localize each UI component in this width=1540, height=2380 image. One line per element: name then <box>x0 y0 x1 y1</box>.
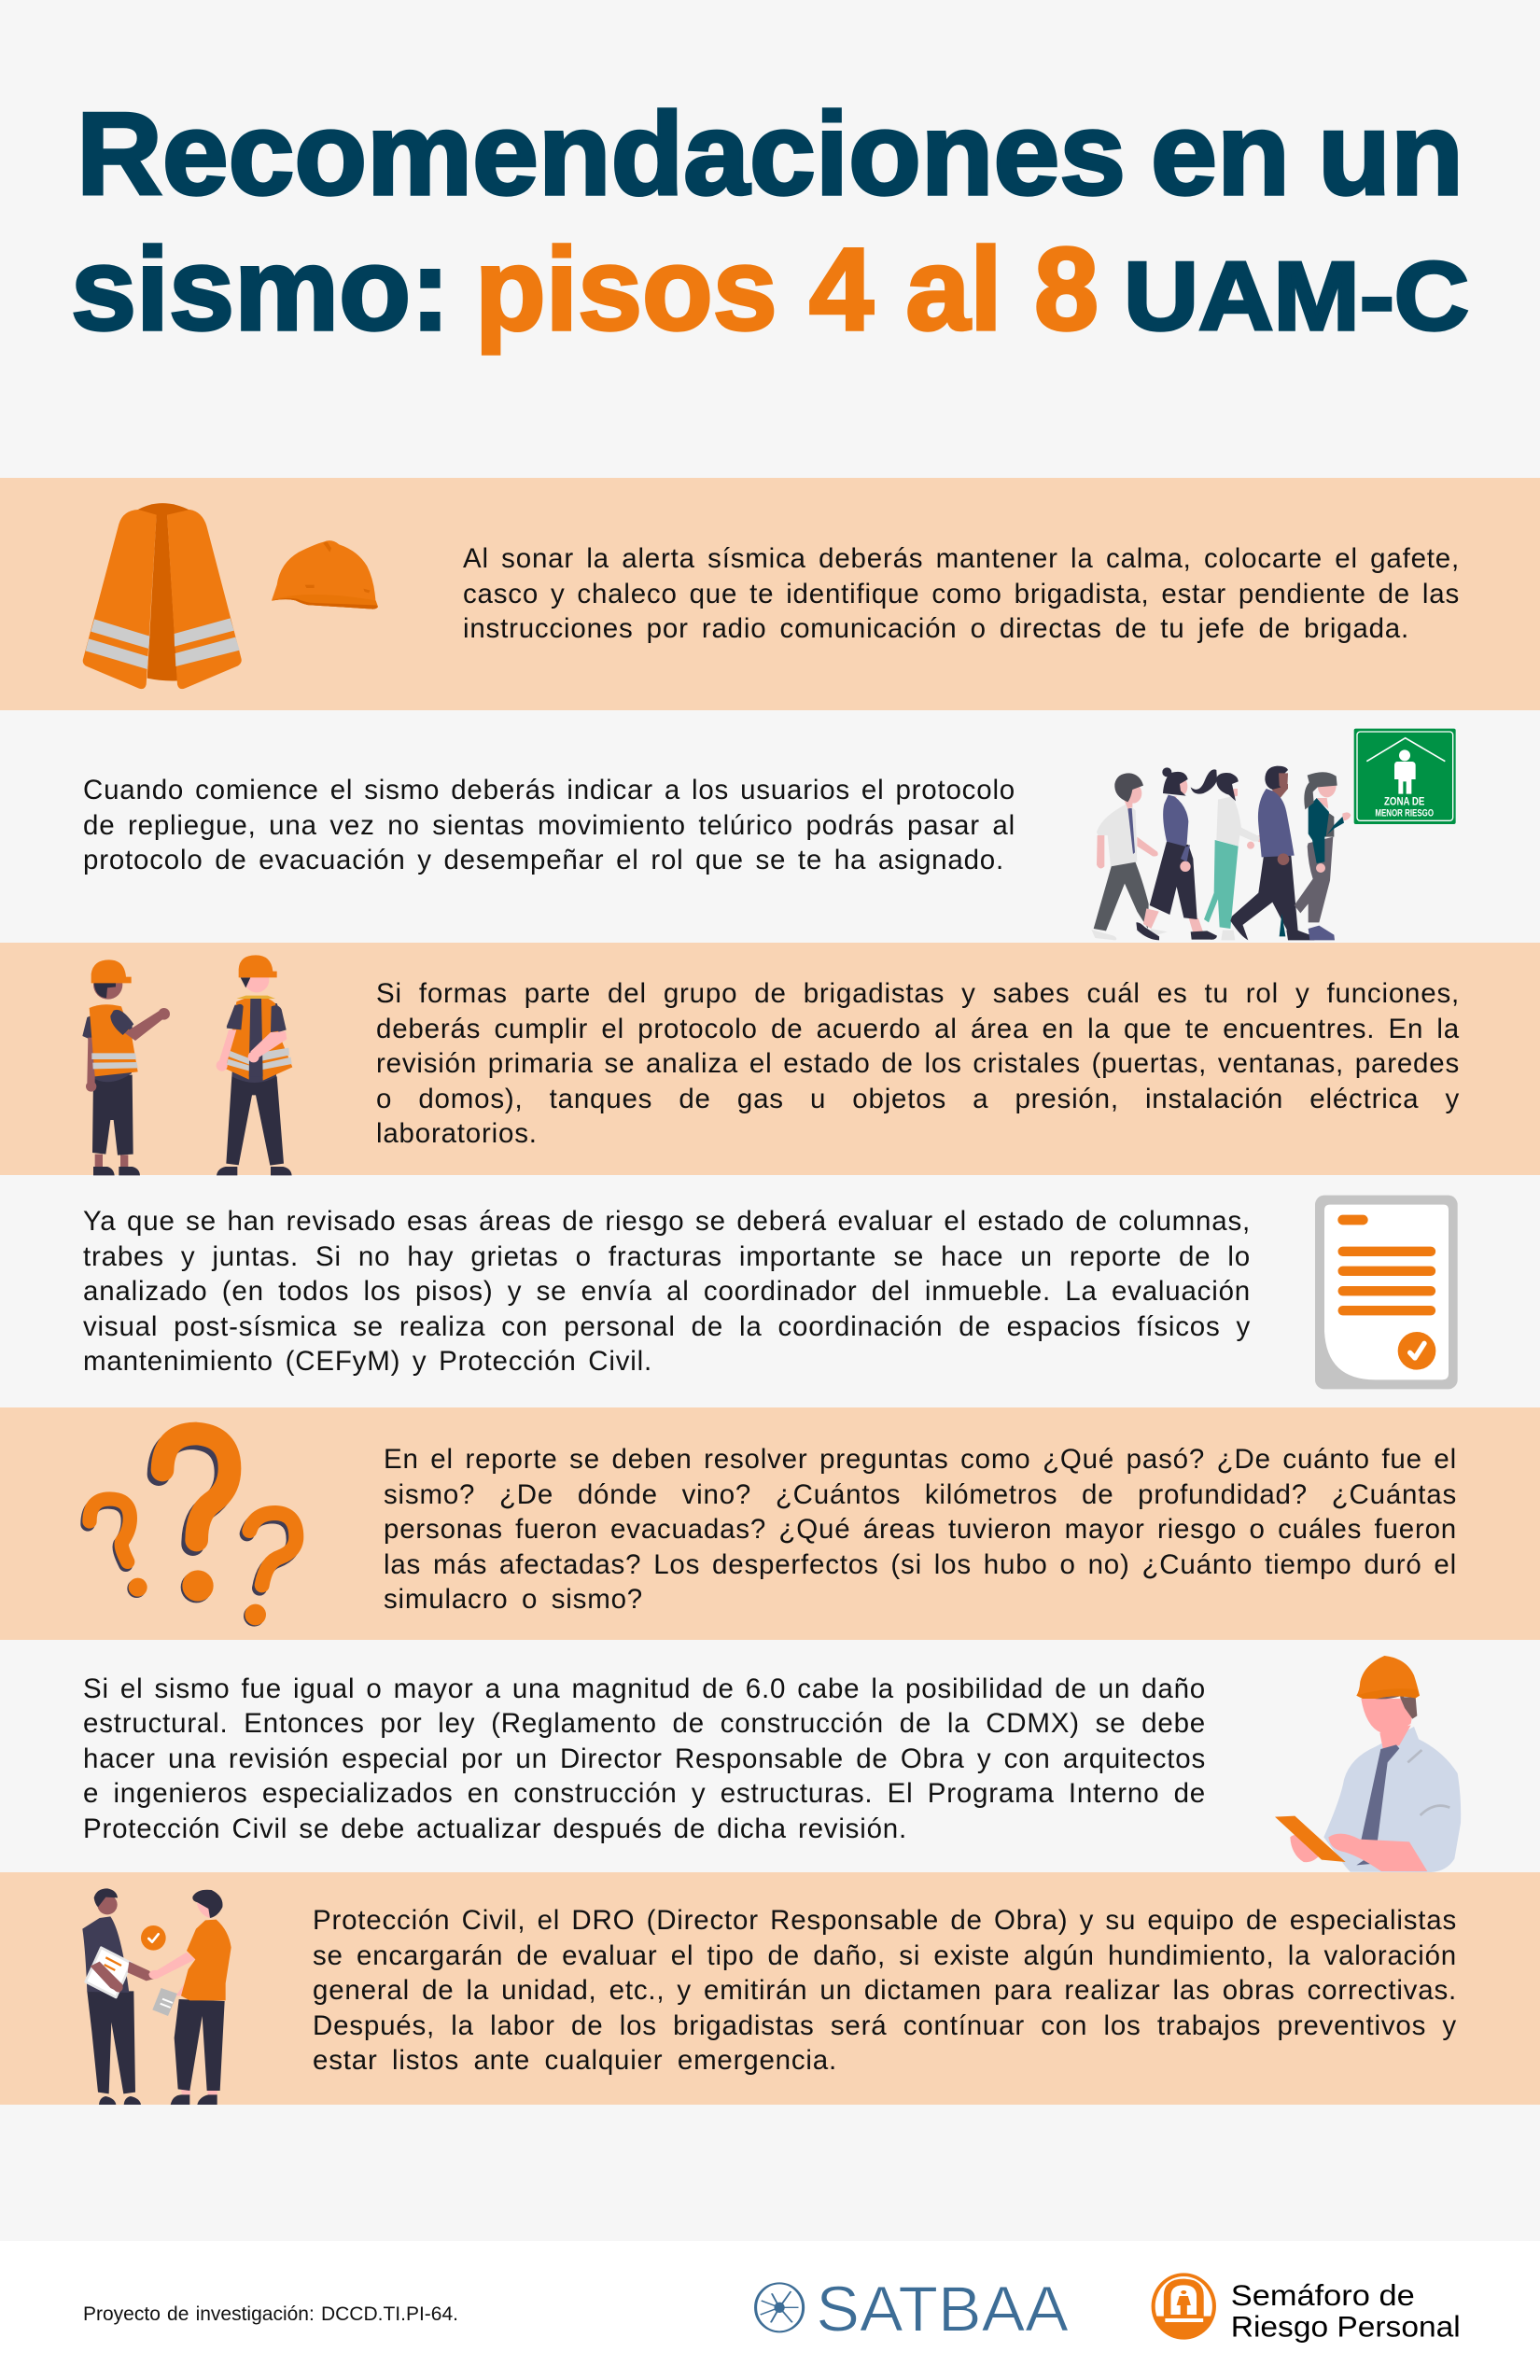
text block 4: mantenimiento (CEFyM) y Protección Civil. <box>83 1346 652 1377</box>
text block 6: estructural. Entonces por ley (Reglamento de construcción de la CDMX) se debe <box>83 1708 1206 1739</box>
text block 3: revisión primaria se analiza el estado de los cristales (puertas, ventanas, paredes <box>376 1048 1460 1079</box>
icon: checked report document <box>1315 1195 1458 1389</box>
text block 1 <box>463 543 1460 644</box>
text block 5: En el reporte se deben resolver preguntas como ¿Qué pasó? ¿De cuánto fue el <box>384 1444 1457 1475</box>
panel: band 7 <box>0 1872 1540 2105</box>
brigadist left <box>82 959 170 1175</box>
text block 7: general de la unidad, etc., y emitirán un dictamen para realizar las obras correctivas. <box>313 1975 1457 2006</box>
logo: Semaforo de Riesgo Personal <box>1152 2273 1461 2343</box>
footer credit text: Proyecto de investigación: DCCD.TI.PI-64. <box>83 2303 458 2324</box>
text block 4: analizado (en todos los pisos) y se envía al coordinador del inmueble. La evaluación <box>83 1276 1251 1307</box>
illustration: group walking to safe zone sign <box>1092 728 1456 941</box>
logo: Semaforo de Riesgo Personal: Semáforo de <box>1231 2278 1415 2312</box>
logo: SATBAA <box>754 2274 1069 2345</box>
text block 3: laboratorios. <box>376 1118 538 1149</box>
text block 5: personas fueron evacuadas? ¿Qué áreas tuvieron mayor riesgo o cuáles fueron <box>384 1514 1457 1545</box>
text block 7: Protección Civil, el DRO (Director Responsable de Obra) y su equipo de especialistas <box>313 1905 1457 1936</box>
title: sismo: <box>71 225 450 355</box>
logo: SATBAA: SATBAA <box>816 2274 1069 2345</box>
text block 5: sismo? ¿De dónde vino? ¿Cuántos kilómetros de profundidad? ¿Cuántas <box>384 1478 1457 1510</box>
text block 4 <box>83 1206 1251 1377</box>
text block 3: deberás cumplir el protocolo de acuerdo al área en la que te encuentres. En la <box>376 1014 1460 1043</box>
icon: three question marks <box>80 1422 304 1627</box>
title: en <box>1151 90 1290 219</box>
person 3 <box>1191 769 1264 940</box>
title: Recomendaciones <box>77 90 1126 219</box>
illustration: two brigade members <box>82 955 293 1176</box>
text block 7 <box>313 1905 1457 2076</box>
panel: band 3 <box>0 943 1540 1175</box>
person 4 <box>1230 766 1314 940</box>
text block 6: Si el sismo fue igual o mayor a una magnitud de 6.0 cabe la posibilidad de un daño <box>83 1673 1206 1704</box>
sign: zona de menor riesgo: MENOR RIESGO <box>1375 808 1434 819</box>
person 2 <box>1136 767 1217 940</box>
panel: band 1 <box>0 478 1540 710</box>
text block 2 <box>83 775 1015 875</box>
footer <box>0 2241 1540 2380</box>
text block 2: de repliegue, una vez no sientas movimiento telúrico podrás pasar al <box>83 810 1015 840</box>
brigadist right <box>217 955 292 1175</box>
panel: band 5 <box>0 1407 1540 1640</box>
text block 3: Si formas parte del grupo de brigadistas y sabes cuál es tu rol y funciones, <box>376 978 1460 1009</box>
title: UAM-C <box>1124 243 1469 351</box>
illustration: engineer with tablet <box>1275 1656 1462 1872</box>
person 5 <box>1295 772 1351 940</box>
text block 6: Protección Civil se debe actualizar después de dicha revisión. <box>83 1813 907 1844</box>
text block 2: protocolo de evacuación y desempeñar el rol que se te ha asignado. <box>83 845 1004 875</box>
text block 1: Al sonar la alerta sísmica deberás mantener la calma, colocarte el gafete, <box>463 543 1460 574</box>
text block 6 <box>83 1673 1206 1844</box>
text block 5 <box>384 1444 1457 1615</box>
sign: zona de menor riesgo: ZONA DE <box>1384 795 1425 807</box>
text block 6: e ingenieros especializados en construcción y estructuras. El Programa Interno de <box>83 1778 1206 1809</box>
title: un <box>1318 90 1463 219</box>
text block 3: o domos), tanques de gas u objetos a presión, instalación eléctrica y <box>376 1083 1460 1114</box>
sign: zona de menor riesgo <box>1354 729 1456 824</box>
person 1 <box>1091 773 1168 940</box>
check badge <box>141 1925 166 1951</box>
text block 2: Cuando comience el sismo deberás indicar a los usuarios el protocolo <box>83 775 1015 805</box>
text block 6: hacer una revisión especial por un Director Responsable de Obra y con arquitectos <box>83 1743 1206 1773</box>
text block 1: casco y chaleco que te identifique como brigadista, estar pendiente de las <box>463 579 1460 609</box>
title: pisos 4 al 8 <box>475 225 1099 355</box>
text block 4: Ya que se han revisado esas áreas de riesgo se deberá evaluar el estado de columnas, <box>83 1206 1251 1237</box>
text block 5: las más afectadas? Los desperfectos (si los hubo o no) ¿Cuánto tiempo duró el <box>384 1549 1457 1579</box>
right person <box>148 1890 231 2105</box>
text block 3 <box>376 978 1460 1149</box>
text block 4: trabes y juntas. Si no hay grietas o fracturas importante se hace un reporte de lo <box>83 1241 1251 1271</box>
text block 1: instrucciones por radio comunicación o directas de tu jefe de brigada. <box>463 613 1409 644</box>
icon: safety vest and helmet <box>82 503 378 689</box>
title <box>71 90 1469 356</box>
text block 7: se encargarán de evaluar el tipo de daño, si existe algún hundimiento, la valoración <box>313 1939 1457 1971</box>
text block 7: estar listos ante cualquier emergencia. <box>313 2045 837 2076</box>
left person <box>82 1888 155 2105</box>
text block 7: Después, la labor de los brigadistas será contínuar con los trabajos preventivos y <box>313 2010 1457 2040</box>
illustration: handshake between two people <box>82 1888 231 2105</box>
text block 5: simulacro o sismo? <box>384 1584 643 1615</box>
text block 4: visual post-sísmica se realiza con personal de la coordinación de espacios físicos y <box>83 1310 1251 1342</box>
